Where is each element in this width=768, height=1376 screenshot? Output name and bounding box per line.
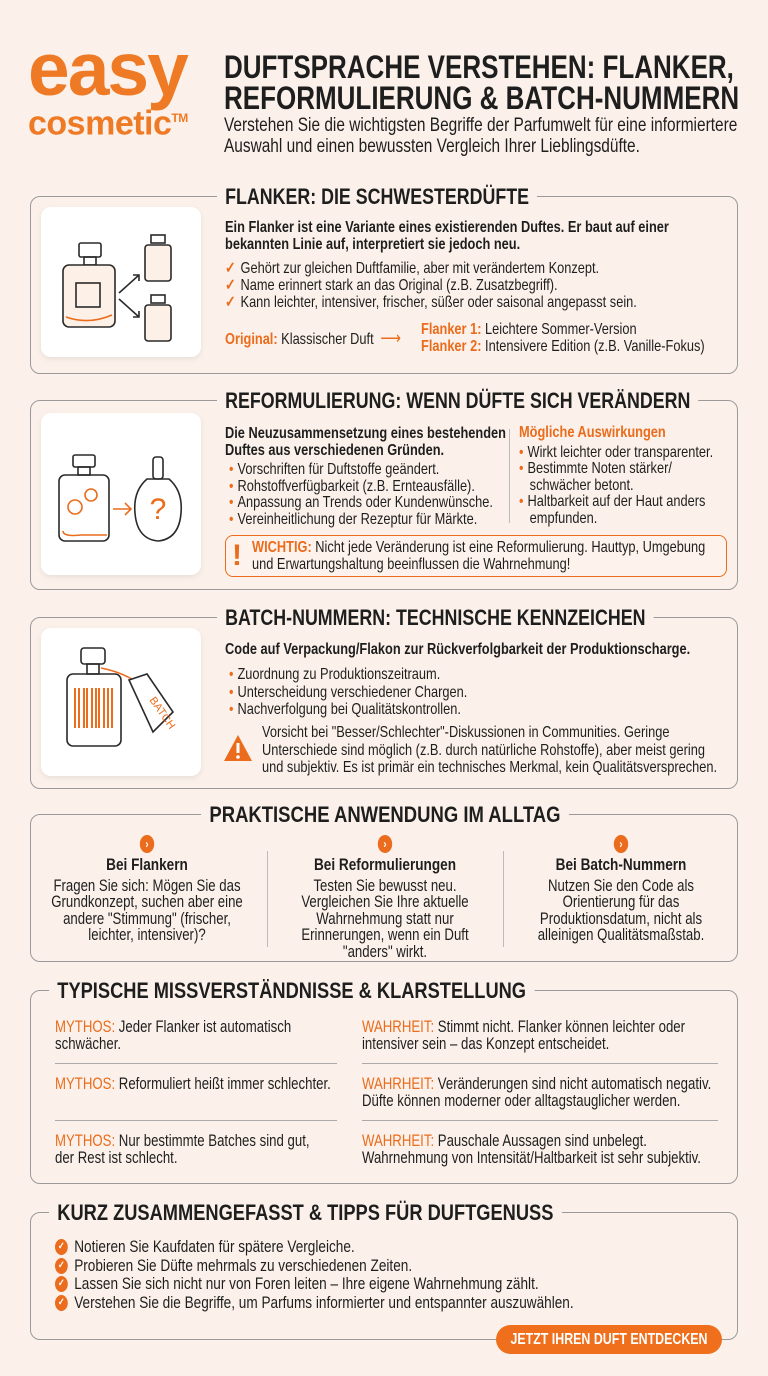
truth 3: Wahrnehmung von Intensität/Haltbarkeit ist sehr subjektiv. [362, 1148, 701, 1166]
truth 1 [362, 1018, 685, 1052]
column: bei flankern: Fragen Sie sich: Mögen Sie das [53, 876, 241, 894]
logo: easy [28, 27, 187, 111]
column: bei batch-nummern [538, 835, 704, 944]
heading: flanker: FLANKER: DIE SCHWESTERDÜFTE [225, 184, 529, 209]
column: bei reformulierungen: Vergleichen Sie Ihre aktuelle [301, 893, 469, 911]
list: reasons: Vereinheitlichung der Rezeptur für Märkte. [237, 510, 477, 528]
text: batch caution: Vorsicht bei "Besser/Schlechter"-Diskussionen in Communities. Geringe [262, 724, 669, 741]
panel: flanker: Flanker 1: Leichtere Sommer-Version [421, 321, 637, 338]
column: possible effects: Haltbarkeit auf der Haut anders [527, 493, 705, 510]
callout: wichtig: ! [232, 539, 242, 572]
text: reformulierung definition: Die Neuzusammensetzung eines bestehenden [225, 425, 506, 442]
list: tips: ✓ [58, 1260, 65, 1270]
list: tips: ✓ [58, 1241, 65, 1252]
myth 3 [55, 1132, 310, 1166]
column: possible effects: empfunden. [530, 510, 597, 526]
text: batch caution: und subjektiv. Es ist primär ein technisches Merkmal, kein Qualitätsversprechen. [262, 759, 717, 776]
list: tips: Notieren Sie Kaufdaten für spätere Vergleiche. [74, 1237, 355, 1256]
truth 2 [362, 1075, 711, 1110]
list: tips: Verstehen Sie die Begriffe, um Parfums informierter und entspannter auszuwählen. [74, 1292, 574, 1312]
text: batch caution: Unterschiede sind möglich (z.B. durch natürliche Rohstoffe), aber meist gering [262, 742, 705, 758]
column: bei reformulierungen: Wahrnehmung statt nur [316, 910, 454, 928]
callout: wichtig: und Erwartungshaltung beeinflussen die Wahrnehmung! [252, 556, 570, 572]
list: batch purposes [230, 666, 467, 718]
list: flanker checks: Gehört zur gleichen Duftfamilie, aber mit verändertem Konzept. [241, 260, 599, 277]
subtitle: Verstehen Sie die wichtigsten Begriffe der Parfumwelt für eine informiertere [224, 115, 737, 136]
callout: wichtig: WICHTIG: Nicht jede Veränderung ist eine Reformulierung. Hauttyp, Umgebung [252, 539, 705, 556]
panel: missverständnisse [30, 990, 738, 1184]
list: flanker checks [226, 260, 637, 311]
icon: gear bottle to question bottle: ? [150, 493, 166, 526]
truth 3: WAHRHEIT: Pauschale Aussagen sind unbelegt. [362, 1132, 647, 1150]
list: tips: ✓ [58, 1296, 65, 1308]
icon: barcode bottle with tag [41, 628, 201, 776]
column: possible effects: Mögliche Auswirkungen [519, 424, 666, 441]
panel: reformulierung [30, 400, 738, 590]
myth 3: der Rest ist schlecht. [55, 1148, 178, 1166]
button: cta: JETZT IHREN DUFT ENTDECKEN [510, 1331, 708, 1348]
column: possible effects: Wirkt leichter oder transparenter. [527, 444, 713, 460]
text: batch caution [262, 724, 717, 776]
list: batch purposes: Nachverfolgung bei Qualitätskontrollen. [237, 701, 461, 718]
button: cta [496, 1325, 722, 1354]
icon: warning triangle [224, 735, 252, 761]
list: batch purposes: Unterscheidung verschiedener Chargen. [237, 684, 467, 700]
column: bei flankern: Bei Flankern [106, 855, 188, 874]
panel: praktische anwendung [30, 814, 738, 962]
myth 2: MYTHOS: Reformuliert heißt immer schlechter. [55, 1075, 331, 1093]
panel: zusammenfassung [30, 1212, 738, 1340]
column: bei reformulierungen: Bei Reformulierungen [314, 855, 456, 874]
list: flanker checks: Kann leichter, intensiver, frischer, süßer oder saisonal angepasst sein. [241, 294, 637, 311]
text: reformulierung definition [225, 425, 506, 459]
panel: batch [30, 617, 738, 789]
myth 1: schwächer. [55, 1034, 121, 1052]
column: bei flankern: › [145, 837, 149, 851]
list: tips [55, 1237, 574, 1312]
column: bei batch-nummern: alleinigen Qualitätsmaßstab. [538, 926, 704, 944]
column: bei batch-nummern: Orientierung für das [563, 893, 679, 911]
heading: batch: BATCH-NUMMERN: TECHNISCHE KENNZEICHEN [225, 605, 646, 630]
truth 3 [362, 1132, 701, 1166]
list: tips: Lassen Sie sich nicht nur von Foren leiten – Ihre eigene Wahrnehmung zählt. [74, 1274, 539, 1293]
myth 1: MYTHOS: Jeder Flanker ist automatisch [55, 1018, 291, 1036]
title: REFORMULIERUNG & BATCH-NUMMERN [224, 80, 739, 116]
list: reasons [230, 461, 493, 528]
column: bei batch-nummern: Bei Batch-Nummern [556, 855, 686, 874]
title [224, 49, 739, 116]
truth 1: intensiver sein – das Konzept entscheidet. [362, 1034, 609, 1052]
column: bei batch-nummern: Produktionsdatum, nicht als [540, 910, 702, 928]
panel: flanker [30, 196, 738, 374]
list: reasons: Vorschriften für Duftstoffe geändert. [237, 461, 439, 478]
list: reasons: Anpassung an Trends oder Kundenwünsche. [237, 494, 493, 511]
truth 2: WAHRHEIT: Veränderungen sind nicht automatisch negativ. [362, 1075, 711, 1093]
icon: flanker bottles [41, 207, 201, 357]
panel: flanker: Flanker 2: Intensivere Edition (z.B. Vanille-Fokus) [421, 338, 705, 355]
column: bei reformulierungen: Testen Sie bewusst neu. [313, 876, 457, 894]
column: bei batch-nummern: › [619, 837, 623, 851]
list: tips: ✓ [58, 1278, 65, 1289]
subtitle: Auswahl und einen bewussten Vergleich Ihrer Lieblingsdüfte. [224, 136, 640, 157]
callout: wichtig [225, 535, 727, 577]
column: possible effects: schwächer betont. [530, 476, 634, 494]
logo: cosmeticTM [28, 104, 188, 142]
list: tips: Probieren Sie Düfte mehrmals zu verschiedenen Zeiten. [74, 1256, 412, 1274]
text: flanker definition: Ein Flanker ist eine Variante eines existierenden Duftes. Er baut auf einer [225, 219, 669, 236]
column: bei reformulierungen [301, 835, 469, 960]
column: bei flankern: andere "Stimmung" (frischer, [63, 910, 231, 928]
column: possible effects [519, 424, 713, 526]
column: bei reformulierungen: "anders" wirkt. [343, 942, 427, 960]
column: bei flankern: Grundkonzept, suchen aber eine [51, 893, 243, 911]
myth 3: MYTHOS: Nur bestimmte Batches sind gut, [55, 1132, 310, 1150]
subtitle [224, 115, 737, 157]
column: bei flankern [51, 835, 243, 944]
column: bei reformulierungen: › [383, 837, 387, 851]
text: batch definition: Code auf Verpackung/Flakon zur Rückverfolgbarkeit der Produktionscharge. [225, 641, 690, 658]
column: bei flankern: leichter, intensiver)? [88, 926, 206, 944]
myth 1 [55, 1018, 291, 1052]
heading: mythen: TYPISCHE MISSVERSTÄNDNISSE & KLARSTELLUNG [57, 978, 526, 1003]
text: reformulierung definition: Duftes aus verschiedenen Gründen. [225, 442, 444, 459]
column: bei reformulierungen: Erinnerungen, wenn ein Duft [301, 926, 469, 944]
column: possible effects: Bestimmte Noten stärker/ [527, 460, 672, 477]
text: flanker definition [225, 219, 669, 253]
column: bei batch-nummern: Nutzen Sie den Code als [548, 876, 694, 894]
truth 2: Düfte können moderner oder alltagstauglicher werden. [362, 1092, 680, 1110]
heading: reformulierung: REFORMULIERUNG: WENN DÜFTE SICH VERÄNDERN [225, 388, 690, 413]
list: reasons: Rohstoffverfügbarkeit (z.B. Ernteausfälle). [237, 478, 475, 494]
heading: zusammenfassung: KURZ ZUSAMMENGEFASST & TIPPS FÜR DUFTGENUSS [57, 1200, 553, 1225]
truth 1: WAHRHEIT: Stimmt nicht. Flanker können leichter oder [362, 1018, 685, 1036]
icon: barcode bottle with tag: BATCH [147, 695, 177, 732]
heading: praxis: PRAKTISCHE ANWENDUNG IM ALLTAG [209, 802, 560, 827]
icon: gear bottle to question bottle [41, 413, 201, 575]
example: original to flankers: Original: Klassischer Duft ⟶ [225, 328, 401, 348]
list: flanker checks: Name erinnert stark an das Original (z.B. Zusatzbegriff). [241, 277, 558, 294]
text: flanker definition: bekannten Linie auf, interpretiert sie jedoch neu. [225, 236, 520, 253]
list: batch purposes: Zuordnung zu Produktionszeitraum. [237, 666, 440, 683]
title: DUFTSPRACHE VERSTEHEN: FLANKER, [224, 49, 734, 85]
